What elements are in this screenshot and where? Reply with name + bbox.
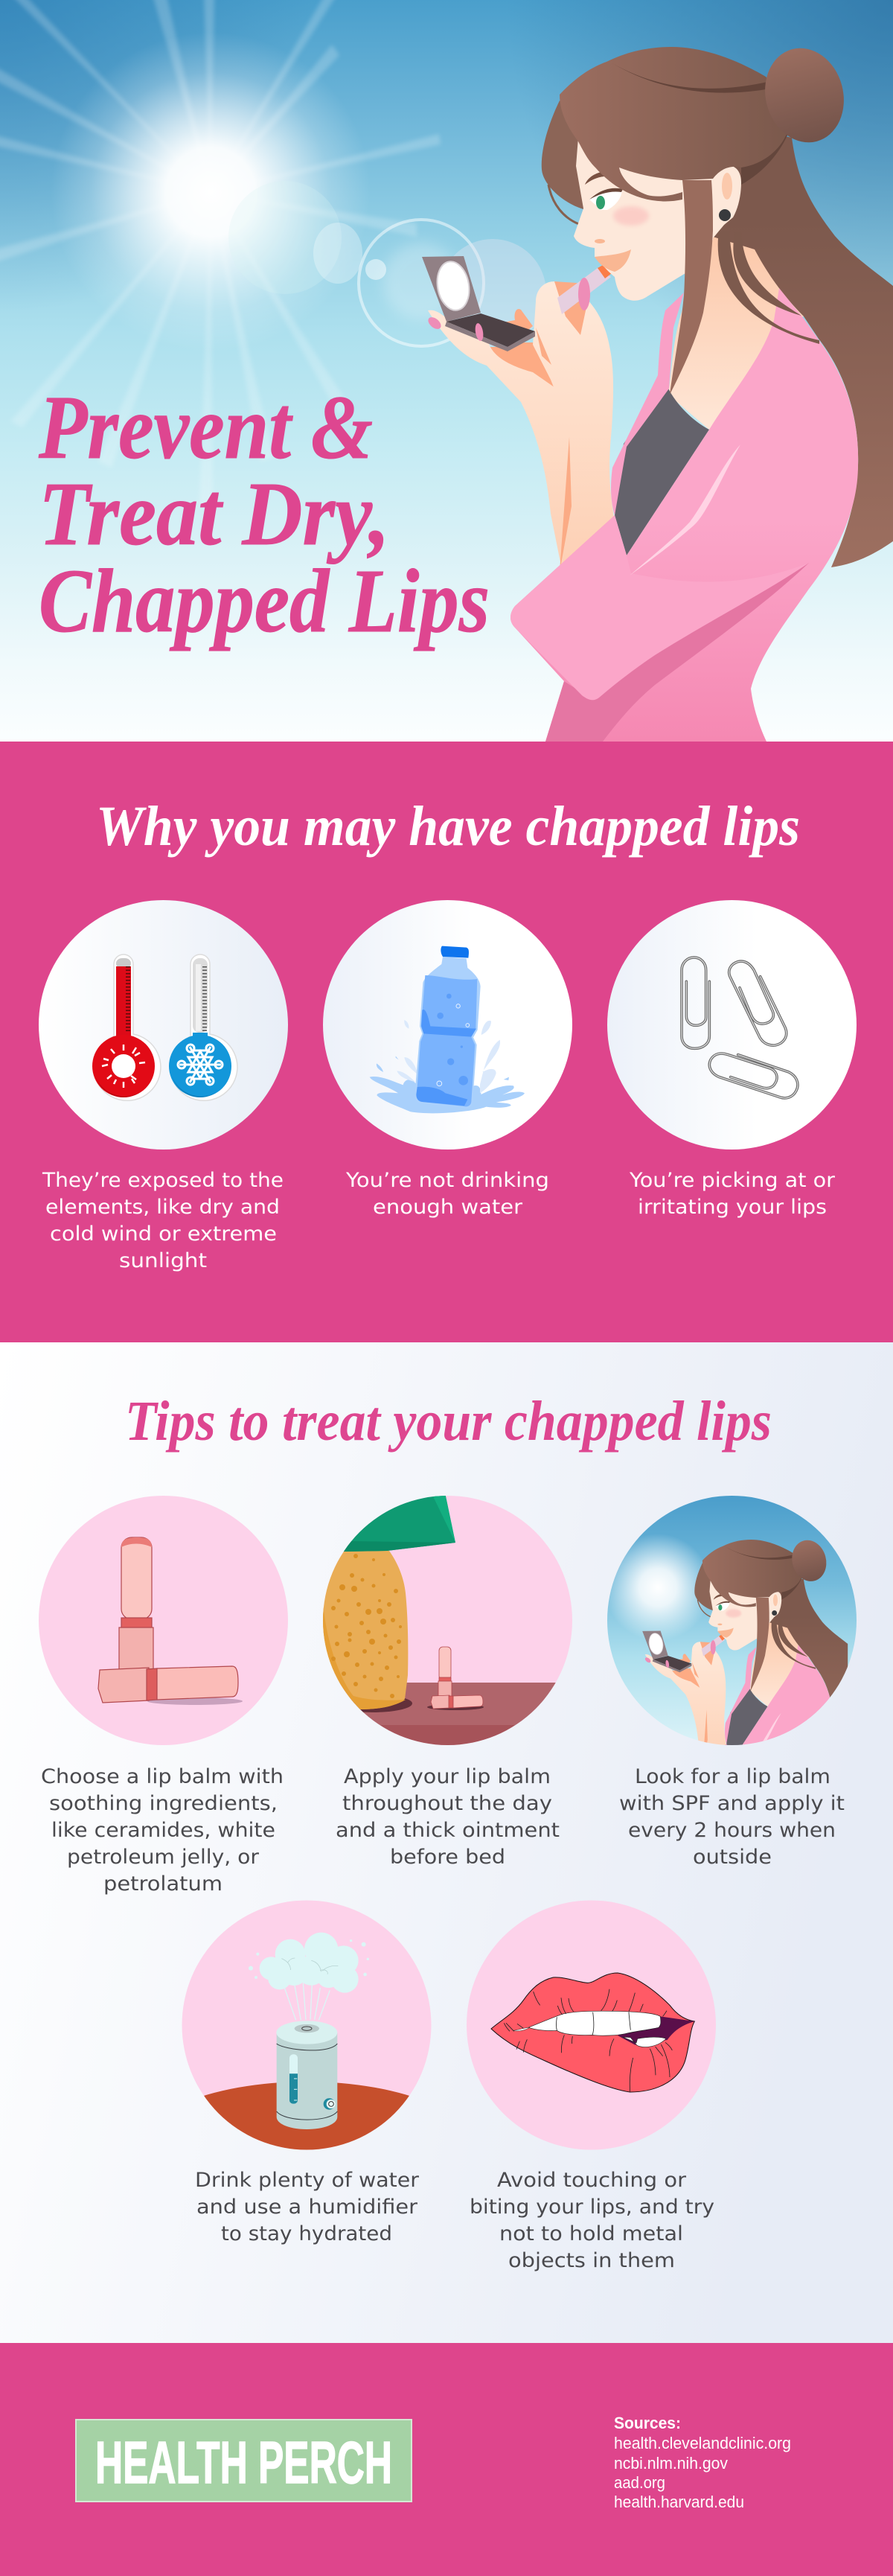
logo: HEALTH PERCH — [95, 2429, 392, 2496]
caption: enough water — [373, 1196, 523, 1219]
tooth and lip creases — [504, 1989, 672, 2091]
sky — [607, 1496, 857, 1745]
icon: biting lips — [491, 1973, 694, 2092]
caption: Look for a lip balm — [635, 1765, 830, 1788]
lipstick — [557, 264, 612, 314]
caption: not to hold metal — [499, 2222, 683, 2245]
caption — [345, 1169, 549, 1219]
sun rays — [0, 0, 441, 506]
sources: ncbi.nlm.nih.gov — [614, 2454, 728, 2473]
water shadows — [416, 1010, 476, 1106]
hair part — [612, 63, 774, 93]
cap — [441, 946, 469, 958]
circle — [182, 1900, 432, 2150]
caption: elements, like dry and — [45, 1196, 280, 1219]
caption — [41, 1765, 284, 1896]
caption — [470, 2169, 714, 2272]
cause: exposure to elements — [39, 900, 288, 1272]
caption: and use a humidifier — [196, 2196, 418, 2219]
sources — [614, 2414, 791, 2511]
caption: outside — [693, 1846, 772, 1869]
lips — [595, 249, 631, 272]
water — [417, 975, 477, 1106]
circle — [607, 900, 857, 1150]
caption: petrolatum — [103, 1872, 223, 1896]
caption — [42, 1169, 284, 1272]
small balm — [427, 1647, 484, 1710]
mist streams — [284, 1983, 330, 2020]
steam detail — [281, 1958, 338, 1974]
sleeve fold — [545, 563, 809, 742]
lip sliver — [513, 2027, 530, 2031]
mouth interior — [618, 2016, 694, 2045]
tip: SPF lip balm — [604, 1496, 857, 1869]
bubbles — [437, 994, 468, 1085]
caption — [629, 1169, 836, 1219]
long front strand — [670, 180, 713, 395]
robe — [510, 288, 858, 742]
caption: irritating your lips — [638, 1196, 827, 1219]
caption: sunlight — [119, 1249, 207, 1272]
tip: choose a lip balm — [39, 1496, 288, 1896]
cause: picking at lips — [607, 900, 857, 1219]
sponge — [320, 1549, 408, 1712]
band lines — [277, 2044, 337, 2120]
caption: They’re exposed to the — [42, 1169, 284, 1192]
circle — [467, 1900, 716, 2150]
dial — [324, 2098, 335, 2110]
dark top — [615, 383, 709, 555]
logo — [76, 2420, 412, 2502]
panel: footer — [0, 2343, 893, 2576]
water gauge — [289, 2054, 298, 2104]
left hand and forearm — [428, 310, 572, 573]
title: Treat Dry, — [39, 464, 390, 564]
arm shadow — [536, 281, 588, 572]
caption: Avoid touching or — [497, 2169, 687, 2192]
title: Prevent & — [38, 377, 373, 478]
cause: not drinking water — [323, 900, 572, 1219]
face — [574, 127, 713, 301]
sources: health.harvard.edu — [614, 2493, 744, 2511]
tip: apply throughout the day — [320, 1493, 577, 1869]
caption: biting your lips, and try — [470, 2196, 714, 2219]
sun — [604, 1534, 711, 1641]
bottle body — [415, 957, 481, 1109]
hair band shadow — [741, 128, 790, 185]
panel: why you may have chapped lips — [0, 742, 893, 1342]
caption: petroleum jelly, or — [67, 1846, 260, 1869]
panel: tips to treat your chapped lips — [0, 1342, 893, 2343]
earring — [719, 209, 731, 221]
lips shape — [491, 1973, 694, 2092]
top vent — [295, 2024, 319, 2033]
caption: with SPF and apply it — [619, 1792, 845, 1815]
circle — [323, 900, 572, 1150]
ear — [711, 165, 741, 238]
heading: Tips to treat your chapped lips — [125, 1390, 772, 1453]
caption: to stay hydrated — [221, 2222, 392, 2245]
icon: humidifier — [249, 1933, 369, 2129]
sky corner shading right — [582, 0, 893, 350]
blush — [613, 206, 649, 226]
heading: Why you may have chapped lips — [96, 795, 800, 858]
caption — [195, 2169, 420, 2245]
caption — [619, 1765, 845, 1869]
circle — [323, 1496, 572, 1745]
sponge texture — [331, 1554, 402, 1698]
nose shadow — [595, 239, 605, 243]
shelf — [320, 1683, 577, 1725]
caption: cold wind or extreme — [50, 1222, 277, 1246]
caption: Apply your lip balm — [344, 1765, 551, 1788]
table — [128, 2082, 485, 2237]
cylinder body — [277, 2033, 337, 2129]
front hair cap — [560, 47, 789, 201]
caption: like ceramides, white — [51, 1819, 275, 1842]
upper teeth — [528, 2011, 661, 2035]
right hand and forearm — [533, 281, 615, 572]
sun glow — [51, 32, 371, 352]
icon: lip balm tubes — [98, 1537, 243, 1705]
mini woman — [642, 1536, 848, 1843]
leaf — [320, 1493, 455, 1552]
caption: Choose a lip balm with — [41, 1765, 284, 1788]
sponge shadow — [332, 1695, 412, 1712]
fingernails — [426, 278, 590, 342]
scene: shelf, sponge, leaf and balm — [320, 1493, 577, 1755]
sources: health.clevelandclinic.org — [614, 2434, 791, 2452]
illustration: mini hero scene — [604, 1496, 857, 1843]
eye — [585, 171, 623, 210]
lower teeth — [623, 2037, 666, 2047]
illustration: woman applying lip balm — [422, 39, 893, 742]
caption: and a thick ointment — [336, 1819, 560, 1842]
left hair — [542, 101, 595, 209]
robe highlight — [630, 444, 740, 576]
sky corner shading left — [0, 0, 222, 280]
robe left lapel — [611, 293, 684, 515]
icon: paper clips — [682, 957, 798, 1098]
far hand palm shadow — [461, 309, 558, 417]
circle — [39, 900, 288, 1150]
icon: water bottle with splash — [370, 946, 525, 1113]
pink background — [0, 2343, 893, 2576]
caption: objects in them — [508, 2249, 675, 2272]
hair bun — [755, 39, 854, 151]
tip: avoid touching lips — [467, 1900, 716, 2272]
neck hair strands — [718, 231, 819, 344]
caption: You’re picking at or — [629, 1169, 836, 1192]
splash — [370, 1077, 525, 1113]
caption: throughout the day — [342, 1792, 552, 1815]
title — [38, 377, 490, 651]
sleeve front — [510, 515, 809, 700]
neck and chest — [668, 237, 804, 430]
sources: Sources: — [614, 2414, 681, 2432]
caption: soothing ingredients, — [49, 1792, 278, 1815]
tip: water and humidifier — [128, 1900, 485, 2245]
back hair — [670, 112, 893, 567]
steam cloud — [249, 1933, 369, 1993]
caption: every 2 hours when — [628, 1819, 836, 1842]
caption: before bed — [390, 1846, 505, 1869]
caption: Drink plenty of water — [195, 2169, 420, 2192]
icon: hot thermometer — [92, 954, 161, 1100]
circle — [39, 1496, 288, 1745]
cylinder top — [276, 2021, 337, 2044]
light background — [0, 1342, 893, 2343]
compact mirror — [422, 256, 535, 351]
sky background — [0, 0, 893, 742]
panel: hero — [0, 0, 893, 742]
caption: You’re not drinking — [345, 1169, 549, 1192]
thin hair strand — [548, 185, 579, 224]
sources: aad.org — [614, 2473, 665, 2492]
pink background — [0, 742, 893, 1342]
title: Chapped Lips — [39, 551, 490, 651]
icon: cold thermometer — [169, 954, 237, 1100]
caption — [336, 1765, 560, 1869]
lens flare — [228, 181, 546, 346]
